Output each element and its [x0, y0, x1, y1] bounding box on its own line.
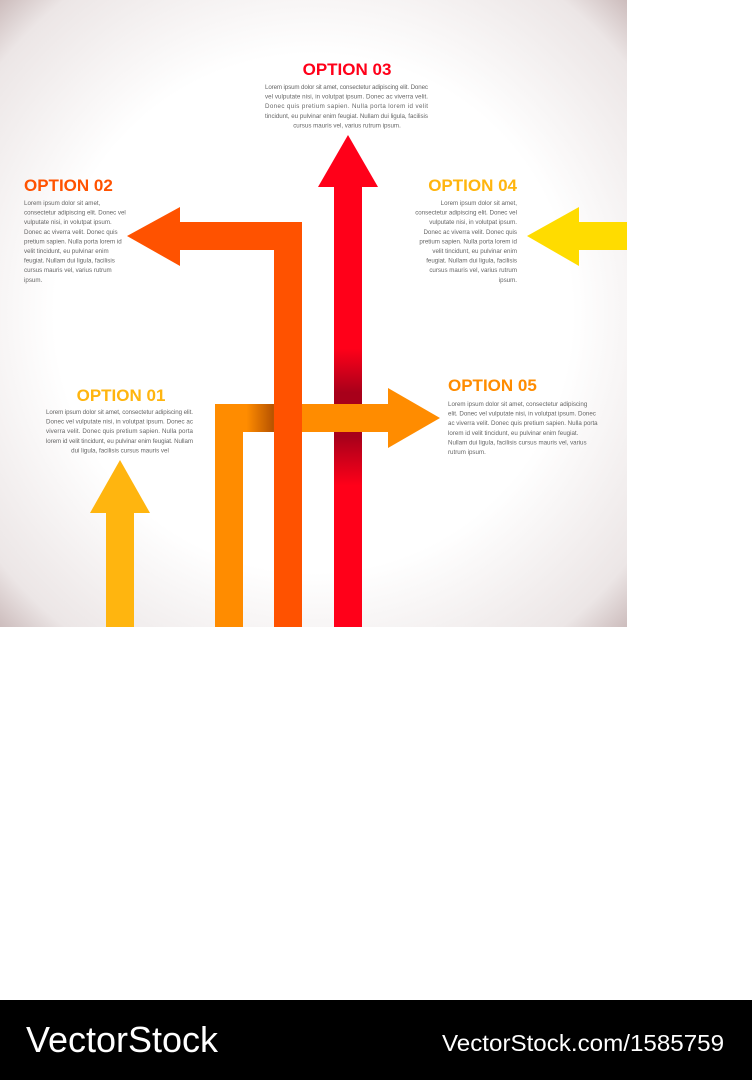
option 03 text: Lorem ipsum dolor sit amet, consectetur adipiscing elit. Donec	[265, 84, 428, 91]
footer bar: VectorStock.com/1585759	[442, 1030, 724, 1056]
option 05 text: lorem id velit tincidunt, eu pulvinar enim feugiat.	[448, 430, 579, 437]
option 04 text: consectetur adipiscing elit. Donec vel	[415, 210, 517, 217]
arrow: option 03 red	[318, 135, 378, 627]
option 03 text: Donec quis pretium sapien. Nulla porta lorem id velit	[265, 103, 428, 110]
option 04 text: OPTION 04	[428, 176, 518, 195]
option 04 text: Lorem ipsum dolor sit amet,	[441, 200, 517, 207]
option 05 text: rutrum ipsum.	[448, 449, 486, 456]
option 01 text: viverra velit. Donec quis pretium sapien. Nulla porta	[46, 428, 194, 435]
option 02 text: pretium sapien. Nulla porta lorem id	[24, 238, 122, 245]
option 01 text: dui ligula, facilisis cursus mauris vel	[71, 447, 169, 454]
option 05 text: Lorem ipsum dolor sit amet, consectetur adipiscing	[448, 401, 588, 408]
footer bar	[0, 1000, 752, 1080]
option 03 text	[265, 60, 428, 129]
option 04 text: cursus mauris vel, varius rutrum	[429, 267, 517, 274]
option 05 text: ac viverra velit. Donec quis pretium sapien. Nulla porta	[448, 420, 598, 427]
option 02 text: vulputate nisi, in volutpat ipsum.	[24, 219, 112, 226]
option 03 text: tincidunt, eu pulvinar enim feugiat. Nullam dui ligula, facilisis	[265, 113, 428, 120]
option 04 text: velit tincidunt, eu pulvinar enim	[432, 248, 517, 255]
option 02 text: consectetur adipiscing elit. Donec vel	[24, 210, 126, 217]
option 01 text: Lorem ipsum dolor sit amet, consectetur adipiscing elit.	[46, 409, 193, 416]
option 02 text: OPTION 02	[24, 176, 113, 195]
option 04 text	[415, 176, 518, 284]
footer bar: VectorStock	[26, 1019, 219, 1060]
option 04 text: pretium sapien. Nulla porta lorem id	[419, 238, 518, 245]
option 01 text	[46, 386, 194, 454]
option 03 text: vel vulputate nisi, in volutpat ipsum. Donec ac viverra velit.	[265, 94, 428, 101]
option 01 text: OPTION 01	[77, 386, 165, 405]
option 02 text: ipsum.	[24, 277, 43, 284]
option 01 text: lorem id velit tincidunt, eu pulvinar enim feugiat. Nullam	[46, 438, 193, 445]
option 02 text: Donec ac viverra velit. Donec quis	[24, 229, 118, 236]
option 05 text: elit. Donec vel vulputate nisi, in volutpat ipsum. Donec	[448, 411, 596, 418]
arrow: option 05 orange	[215, 388, 440, 627]
arrow: option 02 orange-red	[127, 207, 302, 627]
arrow: option 04 yellow	[527, 207, 627, 266]
arrow: option 01 amber	[90, 460, 150, 627]
option 04 text: feugiat. Nullam dui ligula, facilisis	[426, 258, 517, 265]
option 01 text: Donec vel vulputate nisi, in volutpat ipsum. Donec ac	[46, 419, 193, 426]
option 02 text: Lorem ipsum dolor sit amet,	[24, 200, 101, 207]
option 02 text	[24, 176, 126, 284]
option 05 text: OPTION 05	[448, 376, 537, 395]
option 04 text: ipsum.	[499, 277, 517, 284]
option 04 text: Donec ac viverra velit. Donec quis	[423, 229, 517, 236]
option 02 text: feugiat. Nullam dui ligula, facilisis	[24, 258, 115, 265]
option 02 text: cursus mauris vel, varius rutrum	[24, 267, 112, 274]
option 04 text: vulputate nisi, in volutpat ipsum.	[429, 219, 517, 226]
option 03 text: cursus mauris vel, varius rutrum ipsum.	[293, 122, 401, 129]
option 05 text: Nullam dui ligula, facilisis cursus mauris vel, varius	[448, 439, 587, 446]
option 05 text	[448, 376, 598, 456]
option 03 text: OPTION 03	[303, 60, 391, 79]
option 02 text: velit tincidunt, eu pulvinar enim	[24, 248, 109, 255]
